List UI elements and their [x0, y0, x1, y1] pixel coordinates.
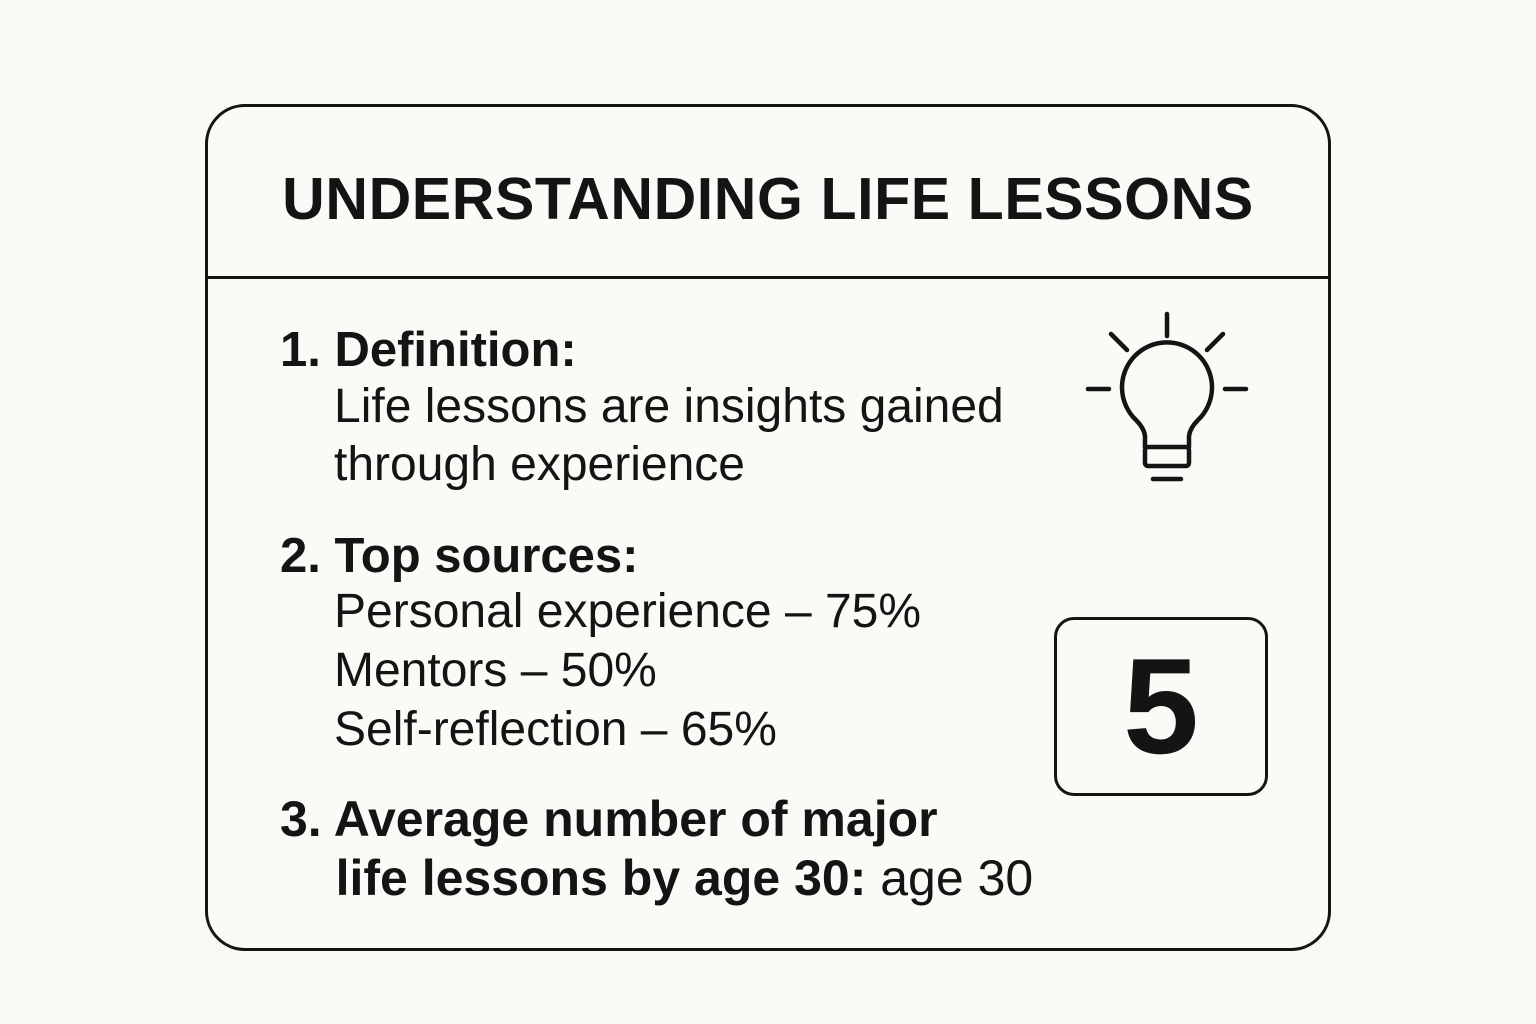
- divider: [208, 276, 1328, 279]
- section 3: life lessons by age 30: age 30: [336, 850, 1033, 906]
- section 1 text: through experience: [334, 438, 745, 491]
- section 2 list: Mentors – 50%: [334, 644, 657, 697]
- section 1 heading: 1. Definition:: [280, 323, 577, 377]
- number box: 5: [1123, 630, 1199, 782]
- section 1 text: Life lessons are insights gained: [334, 380, 1004, 433]
- section 2 list: Self-reflection – 65%: [334, 703, 777, 756]
- card: [205, 104, 1331, 951]
- section 3: [280, 791, 1033, 906]
- number box: [1054, 617, 1268, 796]
- section 2 list: Personal experience – 75%: [334, 585, 921, 638]
- section 3: 3. Average number of major: [280, 791, 938, 847]
- title: UNDERSTANDING LIFE LESSONS: [282, 166, 1254, 232]
- section 1 text: [334, 380, 1004, 491]
- section 2 heading: 2. Top sources:: [280, 529, 639, 583]
- section 2 list: [334, 585, 921, 756]
